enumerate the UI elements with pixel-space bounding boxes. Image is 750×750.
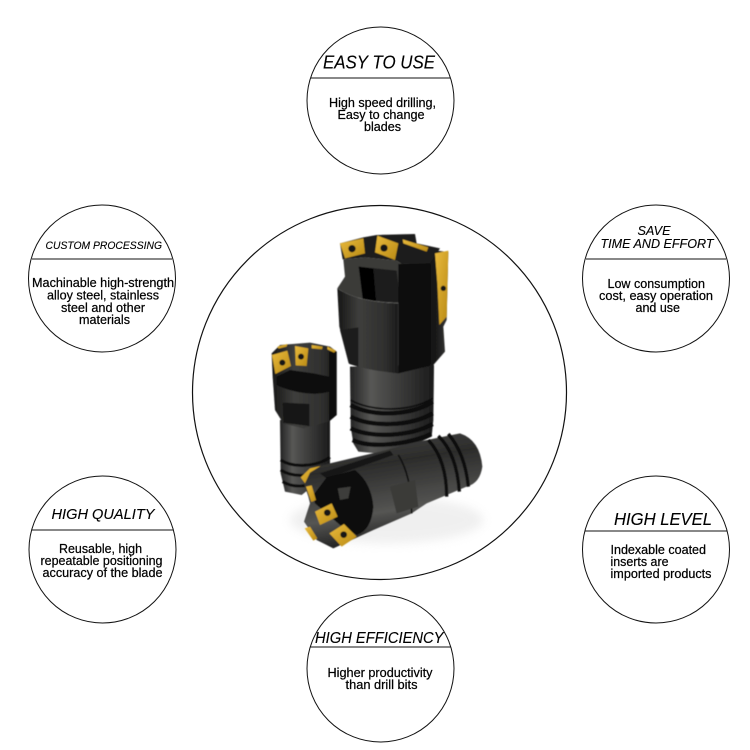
heading: easy to use: EASY TO USE	[323, 52, 436, 72]
panel: custom processing	[28, 205, 176, 352]
panel: high efficiency	[307, 595, 454, 742]
text: easy to use description: High speed drilling,	[329, 96, 436, 110]
text: high quality description: Reusable, high	[59, 542, 142, 556]
text: high level description: imported products	[610, 567, 712, 581]
text: custom processing description: Machinable high-strength	[32, 276, 174, 290]
text: high quality description: repeatable positioning	[40, 554, 163, 568]
text: save time and effort description	[599, 277, 713, 315]
central product circle	[192, 206, 566, 580]
text: custom processing description: steel and other	[61, 301, 145, 315]
text: easy to use description: Easy to change	[338, 108, 425, 122]
front lying drill head	[301, 433, 482, 548]
text: high efficiency description: Higher productivity	[328, 666, 433, 680]
text: high quality description	[40, 542, 163, 580]
text: save time and effort description: Low consumption	[608, 277, 705, 291]
text: save time and effort description: cost, easy operation	[599, 289, 713, 303]
heading: high quality: HIGH QUALITY	[52, 506, 155, 523]
text: custom processing description	[32, 276, 174, 327]
text: high efficiency description: than drill bits	[346, 678, 418, 692]
text: easy to use description: blades	[364, 120, 401, 134]
heading: custom processing: CUSTOM PROCESSING	[46, 240, 162, 252]
text: high level description: inserts are	[610, 555, 669, 569]
heading: save time and effort	[600, 223, 715, 251]
text: custom processing description: materials	[79, 313, 130, 327]
text: high level description	[610, 543, 712, 581]
text: high quality description: accuracy of the blade	[42, 566, 163, 580]
text: high efficiency description	[328, 666, 433, 692]
heading: save time and effort: TIME AND EFFORT	[600, 236, 715, 251]
large drill head	[337, 234, 448, 453]
panel: save time and effort	[582, 205, 730, 352]
heading: save time and effort: SAVE	[638, 223, 671, 238]
text: custom processing description: alloy steel, stainless	[47, 288, 159, 302]
small drill head	[272, 343, 337, 495]
text: easy to use description	[329, 96, 436, 134]
product image: three indexable drill heads	[272, 234, 483, 548]
text: save time and effort description: and use	[636, 301, 680, 315]
panel: high level	[582, 476, 730, 623]
panel: easy to use	[307, 27, 454, 174]
heading: high level: HIGH LEVEL	[614, 509, 712, 529]
text: high level description: Indexable coated	[610, 543, 706, 557]
panel: high quality	[29, 476, 176, 623]
heading: high efficiency: HIGH EFFICIENCY	[315, 630, 445, 647]
